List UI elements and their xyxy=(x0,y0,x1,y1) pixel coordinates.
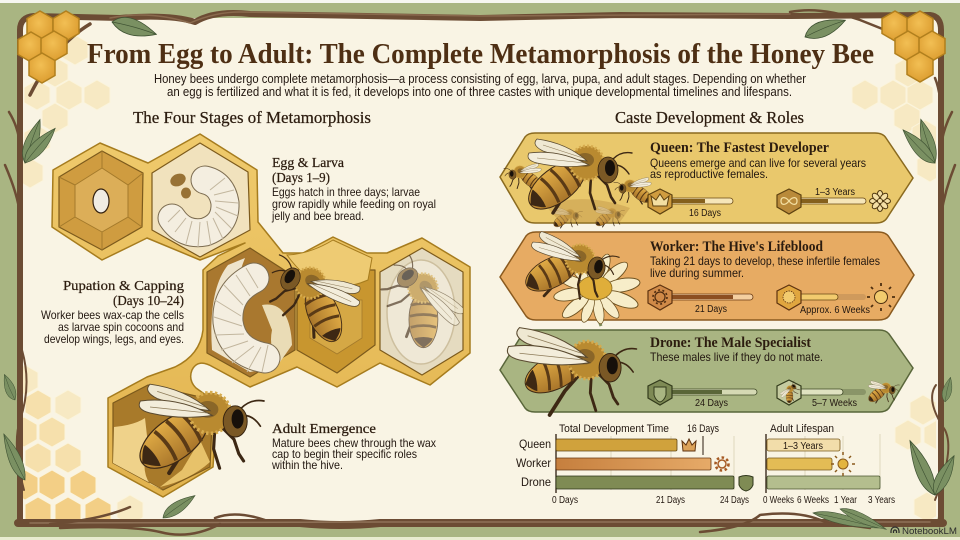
bar: drone xyxy=(556,476,734,489)
queen development bar: 16 Days xyxy=(689,208,721,219)
heading: caste development: Caste Development & Roles xyxy=(615,108,804,127)
icon: flower xyxy=(870,190,890,212)
panel: drone xyxy=(500,328,913,417)
text: egg and larva: grow rapidly while feeding on royal xyxy=(272,197,436,211)
icon: daisy xyxy=(553,252,641,326)
text: egg and larva: (Days 1–9) xyxy=(272,170,330,185)
heading: four stages: The Four Stages of Metamorphosis xyxy=(133,108,371,127)
text: adult emergence: within the hive. xyxy=(271,458,343,472)
worker lifespan bar xyxy=(777,285,870,316)
text: egg and larva xyxy=(271,156,436,223)
axis labels xyxy=(552,495,749,506)
worker development bar: 21 Days xyxy=(695,304,727,315)
text: pupation and capping: Worker bees wax-cap the cells xyxy=(41,308,184,322)
queen lifespan bar xyxy=(777,187,866,214)
chart title: Adult Lifespan xyxy=(770,423,834,435)
row labels: Drone xyxy=(521,475,551,489)
axis labels: 24 Days xyxy=(720,495,749,506)
queen description xyxy=(650,156,866,181)
bar: drone lifespan xyxy=(767,476,880,489)
drone heading: Drone: The Male Specialist xyxy=(650,335,811,351)
honeycomb corner: top left xyxy=(18,11,79,83)
axis labels: 1 Year xyxy=(834,495,858,506)
panel: worker xyxy=(500,229,914,326)
cell: larva xyxy=(152,143,250,257)
bar label: 1–3 Years xyxy=(783,441,823,452)
cell: adult emergence xyxy=(113,384,264,490)
text: pupation and capping: (Days 10–24) xyxy=(113,293,184,308)
text: pupation and capping xyxy=(41,279,184,346)
worker description xyxy=(650,254,880,280)
axis labels xyxy=(763,495,895,506)
text: adult emergence xyxy=(271,422,436,472)
subtitle: an egg is fertilized and what it is fed, it develops into one of three castes with unique developmental timelines and lifespans. xyxy=(167,84,792,99)
icon: drone bee xyxy=(507,328,636,417)
icon: bee in capped cell xyxy=(250,244,373,356)
row labels: Queen xyxy=(519,437,551,451)
chart: total development time xyxy=(516,423,753,506)
bar: queen xyxy=(556,439,677,451)
text: egg and larva: Eggs hatch in three days; larvae xyxy=(272,185,420,199)
row labels xyxy=(516,437,551,489)
cell: egg xyxy=(59,151,143,250)
icon: emerging bee xyxy=(130,384,264,480)
text: adult emergence: Adult Emergence xyxy=(272,422,376,437)
title: From Egg to Adult: The Complete Metamorphosis of the Honey Bee xyxy=(87,39,874,70)
text: egg and larva: jelly and bee bread. xyxy=(271,209,364,223)
icon: queen bee xyxy=(520,139,632,218)
axis labels: 0 Weeks xyxy=(763,495,794,506)
axis labels: 6 Weeks xyxy=(797,495,829,506)
icon: small bee xyxy=(866,381,900,405)
queen description: Queens emerge and can live for several years xyxy=(650,156,866,170)
drone development bar: 24 Days xyxy=(695,398,728,409)
callout: 16 days: 16 Days xyxy=(687,423,719,435)
panel: queen xyxy=(500,133,913,230)
text: adult emergence: Mature bees chew through the wax xyxy=(272,436,436,450)
icon: sun xyxy=(831,452,855,476)
bar: worker xyxy=(556,458,711,470)
queen lifespan bar: 1–3 Years xyxy=(815,187,855,198)
cell: cocoon bee xyxy=(379,247,464,376)
drone description: These males live if they do not mate. xyxy=(650,350,823,364)
honeycomb corner: top right xyxy=(882,11,945,82)
bar: queen lifespan xyxy=(767,439,840,451)
chart title: Total Development Time xyxy=(559,423,669,435)
queen description: as reproductive females. xyxy=(650,167,768,181)
axis labels: 0 Days xyxy=(552,495,578,506)
axis labels: 3 Years xyxy=(868,495,895,506)
chart: adult lifespan xyxy=(763,423,895,506)
queen heading: Queen: The Fastest Developer xyxy=(650,140,829,156)
text: pupation and capping: develop wings, legs, and eyes. xyxy=(44,332,184,346)
icon: sun xyxy=(867,283,895,311)
bar: worker lifespan xyxy=(767,458,832,470)
honeycomb stages diagram xyxy=(52,134,473,497)
drone lifespan bar xyxy=(777,379,866,409)
worker development bar xyxy=(648,285,753,315)
icon: worker bee xyxy=(516,229,621,312)
icon: pale pupa bee xyxy=(380,255,463,348)
worker description: live during summer. xyxy=(650,266,744,280)
icon: crown xyxy=(682,439,696,451)
drone lifespan bar: 5–7 Weeks xyxy=(812,398,857,409)
icon: shield xyxy=(739,476,753,491)
wax comb xyxy=(52,134,470,497)
icon: egg xyxy=(93,189,109,213)
subtitle xyxy=(154,71,807,99)
cell: pupation larva xyxy=(207,248,295,377)
drone development bar xyxy=(648,380,757,409)
subtitle: Honey bees undergo complete metamorphosis—a process consisting of egg, larva, pupa, and adult stages. Depending on whether xyxy=(154,71,807,86)
worker description: Taking 21 days to develop, these infertile females xyxy=(650,254,880,268)
queen development bar xyxy=(648,189,733,219)
worker heading: Worker: The Hive's Lifeblood xyxy=(650,239,824,255)
text: pupation and capping: Pupation & Capping xyxy=(63,279,184,294)
cell: capped bee xyxy=(250,240,375,373)
icon: gear xyxy=(716,458,728,470)
text: adult emergence: cap to begin their specific roles xyxy=(272,447,417,461)
watermark: NotebookLM xyxy=(902,526,957,537)
icon: attendant bees xyxy=(504,163,654,230)
axis labels: 21 Days xyxy=(656,495,685,506)
text: egg and larva: Egg & Larva xyxy=(272,156,345,171)
text: pupation and capping: as larvae spin cocoons and xyxy=(58,320,184,334)
row labels: Worker xyxy=(516,456,551,470)
worker lifespan bar: Approx. 6 Weeks xyxy=(800,305,870,316)
